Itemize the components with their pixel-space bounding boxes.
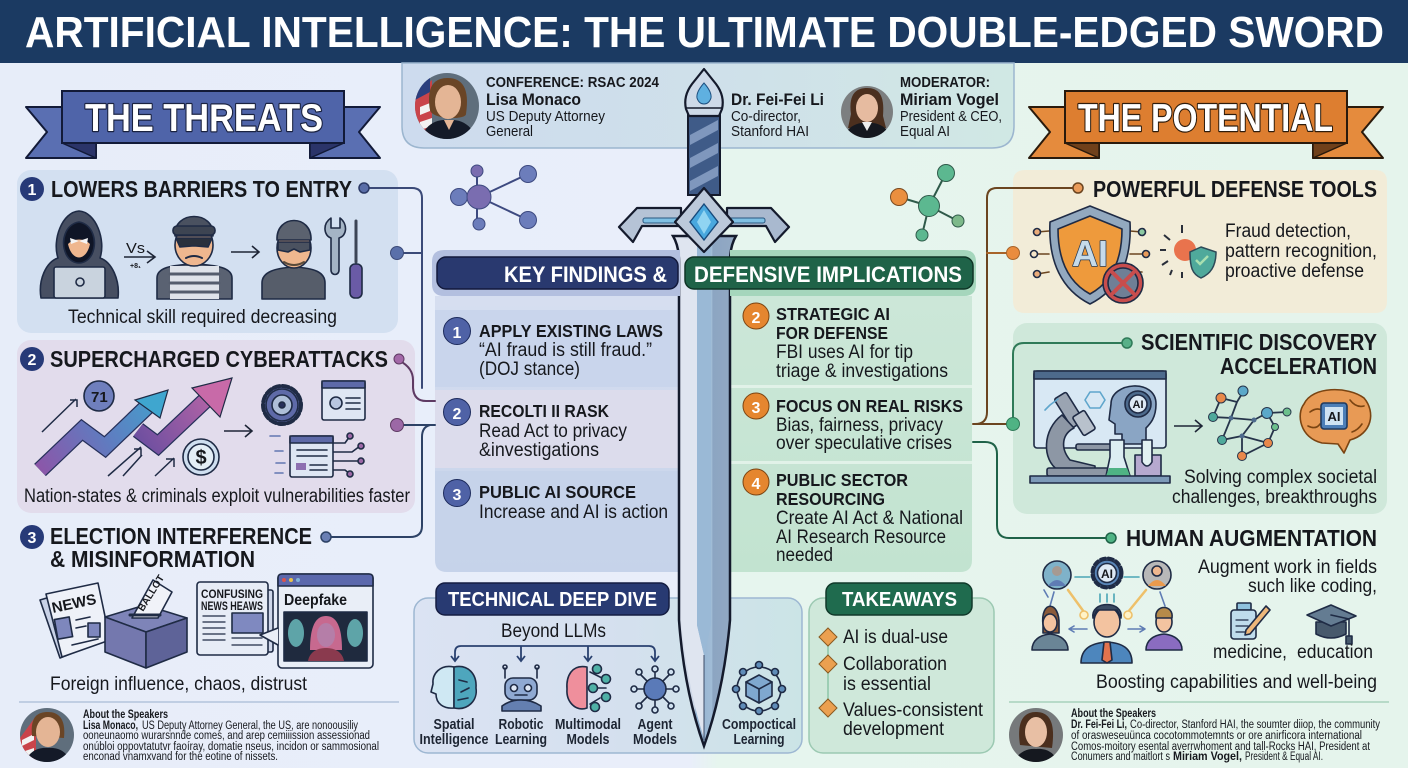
subtitle: Beyond LLMs [501,621,606,642]
model labels: Agent [638,717,673,733]
panel: scientific discovery acceleration [1013,323,1387,514]
panel: technical deep dive [414,583,802,753]
speakers header panel [402,63,1014,148]
about the speakers: right: About the Speakers [1071,708,1156,720]
implication 2 [743,303,948,382]
icon: robotic learning [502,665,541,711]
conference and Lisa Monaco text [486,75,659,140]
icon: AI shield: AI [1072,233,1108,274]
icon: AI brain: AI [1328,409,1340,424]
icon: confusing news page: NEWS HEAWS [201,601,263,613]
icon: clock: 71 [91,389,108,406]
icon: confusing news page [197,582,273,655]
ribbon: the threats: THE THREATS [85,97,323,140]
implication 4: Create AI Act & National [776,508,963,529]
avatar: Lisa Monaco [415,73,479,139]
fields labels [1213,642,1373,663]
takeaway text: Values-consistent [843,700,984,721]
about the speakers: right: President & Equal AI. [1245,751,1323,763]
pommel [685,69,723,116]
heading: & MISINFORMATION [50,546,255,572]
badge 1 [20,177,44,201]
ribbon: the potential [1029,91,1383,158]
takeaway text: is essential [843,674,931,695]
finding 2: 2 [453,406,462,423]
badge 2 [20,347,44,371]
icon: deepfake window: Deepfake [284,592,347,609]
implication 2: STRATEGIC AI [776,304,890,324]
takeaway text [843,627,984,740]
about the speakers: left: Lisa Monaco, [83,720,138,732]
icon: confusing news page: CONFUSING [201,587,263,601]
badge 1: 1 [28,182,37,199]
about the speakers: right: Dr. Fei-Fei Li, [1071,719,1127,731]
label [826,583,972,615]
model labels: Multimodal [555,717,621,733]
banner: key findings and defensive implications: KEY FINDINGS & [504,262,667,287]
panel: right defensive implications [728,296,972,572]
Dr. Fei-Fei Li text: Dr. Fei-Fei Li [731,91,824,109]
about the speakers: right [1071,708,1380,763]
icon: spatial intelligence [431,666,476,708]
panel: powerful defense tools [1013,170,1387,313]
model labels: Models [566,732,610,748]
moderator text: MODERATOR: [900,75,990,91]
conference and Lisa Monaco text: Lisa Monaco [486,91,581,109]
implication 4: 4 [752,476,761,493]
icon: medicine jar [1231,603,1270,639]
icon: vs arrow: Vs [126,240,145,257]
finding 3: Increase and AI is action [479,502,668,523]
model labels: Learning [734,732,784,748]
description: such like coding, [1248,576,1377,597]
heading [1141,329,1377,379]
icon: gear [263,386,301,424]
icon: striped burglar [157,216,232,299]
banner: key findings and defensive implications [432,250,976,296]
sword [619,69,789,746]
label: TAKEAWAYS [842,589,957,611]
caption: Foreign influence, chaos, distrust [50,674,308,695]
icon: novice criminal [262,220,325,299]
description: Augment work in fields [1198,557,1377,578]
icon: agent models [631,666,679,713]
icon: people connected to AI [1032,558,1182,663]
connector lines: threats [326,188,435,537]
about the speakers: left: ooneunaomo wurarsnnde comes, and arep cemiiission assessionad [83,730,370,742]
icon: multimodal models [567,664,610,712]
ribbon: the potential: THE POTENTIAL [1078,97,1333,140]
icon: lab screen with AI head: AI [1132,399,1144,411]
finding 1 [444,318,663,380]
description [1225,221,1377,282]
icon: wrench and screwdriver [325,218,362,298]
conference and Lisa Monaco text: US Deputy Attorney [486,109,606,125]
connector nodes: potential [1006,183,1132,543]
finding 3 [444,480,668,523]
model labels: Learning [495,732,547,748]
icon: molecule [1208,386,1291,460]
finding 1: (DOJ stance) [479,359,580,380]
divider: left speakers [19,701,399,703]
icon: newspaper: NEWS [50,591,98,617]
badge 2: 2 [28,352,37,369]
panel: takeaways [809,583,994,753]
implication 4: PUBLIC SECTOR [776,470,908,490]
ribbon: the threats [26,91,380,158]
description: proactive defense [1225,261,1364,282]
icon: AI brain [1300,390,1371,453]
panel: lowers barriers to entry [17,170,398,333]
implication 2: 2 [752,310,761,327]
finding 2: &investigations [479,440,599,461]
Dr. Fei-Fei Li text: Co-director, [731,109,801,125]
implication 3 [743,393,963,454]
icon: threat burst with shield [1160,225,1216,278]
implication 3: FOCUS ON REAL RISKS [776,396,963,416]
finding 2: Read Act to privacy [479,421,627,442]
heading: SUPERCHARGED CYBERATTACKS [50,346,388,372]
finding 1: APPLY EXISTING LAWS [479,321,663,341]
icon: hooded hacker with laptop [40,211,118,298]
moderator text: Equal AI [900,124,950,140]
description: pattern recognition, [1225,241,1377,262]
about the speakers: left [83,709,379,763]
finding 3: PUBLIC AI SOURCE [479,482,636,502]
icon: graduation cap [1307,605,1356,644]
takeaway text: AI is dual-use [843,627,948,648]
heading: SCIENTIFIC DISCOVERY [1141,329,1377,355]
implication 2: triage & investigations [776,361,948,382]
caption: Technical skill required decreasing [68,307,337,328]
connector lines: potential [973,188,1126,538]
implication 2: FBI uses AI for tip [776,342,913,363]
takeaway diamonds [819,628,837,717]
panel: supercharged cyberattacks [17,340,415,513]
icon: AI shield [1030,206,1150,304]
icon: newspaper [40,583,110,658]
implication 3: 3 [752,400,761,417]
finding 1: 1 [453,325,462,342]
about the speakers: right: Conumers and maitlort s [1071,751,1170,763]
Dr. Fei-Fei Li text: Stanford HAI [731,124,809,140]
gem [675,188,733,252]
banner: key findings and defensive implications: DEFENSIVE IMPLICATIONS [694,262,962,287]
description: challenges, breakthroughs [1172,487,1377,508]
icon: people connected to AI: AI [1101,567,1113,581]
moderator text: President & CEO, [900,109,1002,125]
icon: rising attack arrows chart [40,378,232,476]
heading: LOWERS BARRIERS TO ENTRY [51,176,352,202]
takeaway text: Collaboration [843,654,947,675]
icon: ballot box: BALLOT [136,573,167,614]
icon: dollar coin: $ [195,447,207,469]
icon: ballot box [105,573,187,668]
icon: vs arrow [124,240,155,270]
implication 4: needed [776,545,833,566]
about the speakers: left: About the Speakers [83,709,168,721]
model labels: Robotic [498,717,544,733]
model labels: Compoctical [722,717,796,733]
heading: HUMAN AUGMENTATION [1126,525,1377,551]
model labels: Spatial [434,717,474,733]
Dr. Fei-Fei Li text [731,91,824,140]
fields labels: education [1297,642,1373,663]
icon: vs arrow: +8₁ [130,263,141,270]
about the speakers: right: of orasweseuünca cocotommotemnts or ore anirficora international [1071,730,1362,742]
network icon: right [890,164,964,241]
divider: right speakers [1009,701,1389,703]
avatar: Lisa Monaco small [20,708,74,762]
description: Solving complex societal [1184,467,1377,488]
grip [688,115,720,195]
panel: left key findings [435,296,680,572]
caption: Boosting capabilities and well-being [1096,672,1377,693]
moderator text: Miriam Vogel [900,91,999,109]
description [1198,557,1377,597]
takeaway text: development [843,719,945,740]
icon: arrow [1174,420,1202,432]
implication 3: over speculative crises [776,433,952,454]
icon: deepfake window [260,574,373,668]
model labels [420,717,796,748]
finding 1: “AI fraud is still fraud.” [479,340,652,361]
conference and Lisa Monaco text: General [486,124,533,140]
icon: browser windows with nodes [270,381,365,477]
about the speakers: left: onúbloi oppovtatutvr faoíray, domatie nseus, incidon or sammosional [83,741,379,753]
icon: compoctical learning [732,662,786,714]
description [1172,467,1377,508]
implication 2: FOR DEFENSE [776,323,888,343]
avatar: Miriam Vogel [841,86,893,138]
about the speakers: left: enconad vnamxvand for the eotine of nissets. [83,751,278,763]
finding 2 [444,398,627,461]
about the speakers: left: US Deputy Attorney General, the US, are nonoousiliy [142,720,358,732]
heading: ACCELERATION [1220,353,1377,379]
badge 3 [20,525,44,549]
blade [673,236,736,746]
icon: dollar coin [183,439,219,475]
badge 3: 3 [28,530,37,547]
implication 4: AI Research Resource [776,527,946,548]
section: human augmentation [1032,525,1377,693]
model labels: Intelligence [420,732,488,748]
network icon: left [450,165,536,230]
finding 3: 3 [453,487,462,504]
crossguard [619,208,789,242]
avatar: Fei-Fei Li small [1009,708,1063,762]
tree arrows [451,646,659,661]
finding 2: RECOLTI II RASK [479,401,609,421]
implication 3: Bias, fairness, privacy [776,415,943,436]
implication 4: RESOURCING [776,489,885,509]
heading: ELECTION INTERFERENCE [50,523,312,549]
label: TECHNICAL DEEP DIVE [448,589,657,611]
moderator text [900,75,1002,140]
section: election interference and misinformation [20,523,373,695]
conference and Lisa Monaco text: CONFERENCE: RSAC 2024 [486,75,659,91]
label [436,583,669,615]
about the speakers: right: Miriam Vogel, [1173,751,1242,763]
spine [827,637,829,708]
icon: clock [84,381,114,411]
model labels: Models [633,732,677,748]
implication 4 [743,469,963,566]
fields labels: medicine, [1213,642,1287,663]
caption: Nation-states & criminals exploit vulnerabilities faster [24,486,411,507]
connector nodes: threats [321,183,404,542]
description: Fraud detection, [1225,221,1351,242]
icon: arrow [224,425,252,437]
icon: arrow to novice [231,246,259,258]
heading [50,523,312,572]
icon: lab screen with AI head [1030,371,1170,483]
